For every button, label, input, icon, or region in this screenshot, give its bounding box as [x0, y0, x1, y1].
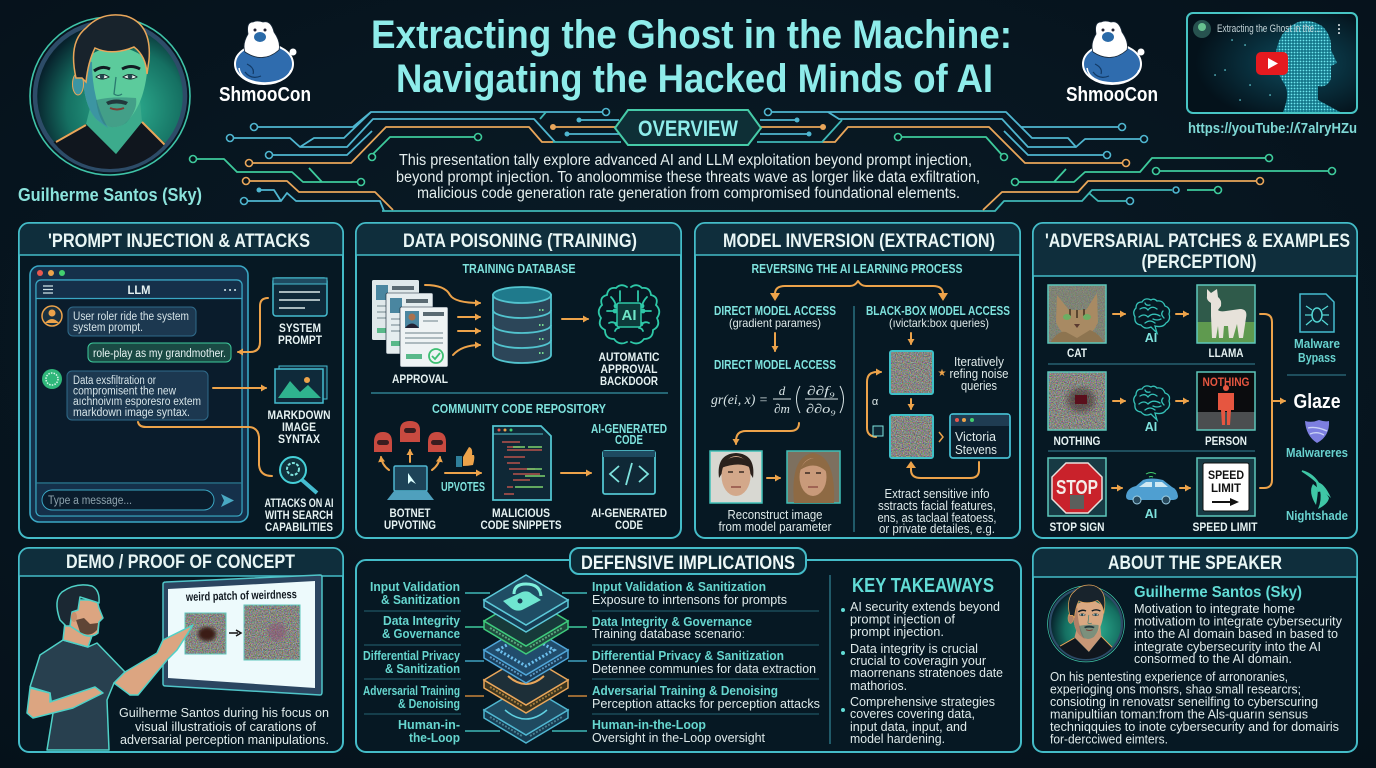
icon: markdown image	[275, 366, 327, 403]
icon: database	[493, 287, 551, 363]
right list: Differential Privacy & Sanitization	[592, 648, 784, 663]
layer: data integrity	[484, 596, 568, 654]
right list: Human-in-the-Loop	[592, 717, 706, 732]
small chevron	[939, 432, 943, 442]
arrow	[1112, 487, 1122, 489]
overview badge	[615, 110, 761, 145]
heading pill: DEFENSIVE IMPLICATIONS	[581, 553, 795, 574]
icon: system prompt	[273, 278, 327, 316]
label: person: PERSON	[1205, 434, 1247, 448]
caption: iteratively: ★	[938, 368, 947, 379]
icon: hackers	[374, 421, 446, 452]
layer: human in the loop	[484, 685, 568, 743]
key takeaways list: prompt injection.	[850, 624, 944, 639]
heading: prompt injection: 'PROMPT INJECTION & ATTACKS	[48, 231, 310, 252]
label: backdoor: APPROVAL	[600, 362, 658, 376]
left labels: & Sanitization	[385, 661, 460, 676]
circuit traces	[190, 108, 1336, 211]
user bubble: User roler ride the system	[73, 311, 189, 323]
overview badge: OVERVIEW	[638, 116, 738, 141]
bio paragraph 2: experioging ons monsrs, shao small researcrs;	[1050, 682, 1301, 696]
image: reconstructed face	[710, 451, 762, 503]
formula: d	[779, 383, 786, 398]
injection bubble	[88, 343, 231, 362]
image: speed limit: SPEED	[1208, 468, 1244, 482]
icon: brain	[1134, 299, 1170, 333]
label: markdown: SYNTAX	[278, 432, 320, 446]
heading: black-box access	[866, 304, 1010, 330]
send icon	[221, 494, 234, 507]
formula: ∂∂o₉	[806, 401, 836, 416]
image: llama	[1197, 285, 1255, 343]
labels: bottom row: UPVOTING	[384, 518, 436, 532]
right list	[592, 579, 820, 745]
bio paragraph 1: consormed to the AI domain.	[1134, 651, 1292, 666]
label: system prompt: SYSTEM	[279, 321, 321, 335]
left labels: & Governance	[382, 626, 460, 641]
presentation screen	[163, 575, 322, 695]
overview text: beyond prompt injection. To anoloommise these threats wave as lorger like data exfiltration,	[396, 169, 980, 186]
title: Navigating the Hacked Minds of AI	[396, 57, 993, 101]
key takeaways list: crucial to coveragin your	[850, 653, 987, 668]
label: nothing: NOTHING	[1054, 434, 1100, 448]
image: noise patch	[1048, 372, 1106, 430]
title	[371, 13, 1012, 101]
subheading: training database: TRAINING DATABASE	[462, 262, 576, 276]
defense stack	[484, 575, 568, 743]
label: system prompt: PROMPT	[278, 333, 323, 347]
panel: demo	[19, 548, 343, 752]
label: nightshade: Nightshade	[1286, 508, 1348, 523]
image: stop sign: STOP	[1056, 477, 1098, 499]
bio paragraph 1	[1134, 601, 1342, 666]
layer: input validation	[484, 575, 568, 632]
bio paragraph 2: techniqquies to inote cybersecurity and for domairis	[1050, 719, 1339, 734]
arrow	[1113, 400, 1125, 402]
patch after	[244, 605, 300, 660]
panel: data poisoning	[356, 223, 681, 538]
subheading: community repo: COMMUNITY CODE REPOSITORY	[432, 402, 607, 416]
heading: direct model access: DIRECT MODEL ACCESS	[714, 304, 836, 318]
right list: Perception attacks for perception attacks	[592, 696, 820, 711]
speaker portrait	[30, 15, 190, 180]
chat window	[30, 266, 248, 522]
icon: AI brain	[599, 285, 659, 343]
ShmooCon logo left: ShmooCon	[219, 84, 311, 106]
arrow: feedback loop	[867, 372, 883, 437]
row: cat to llama	[1048, 285, 1255, 360]
heading: black-box access: (ıvictark:box queries)	[889, 316, 989, 330]
bio paragraph 2	[1050, 669, 1339, 746]
left labels: Data Integrity	[383, 613, 461, 628]
assistant bubble: markdown image syntax.	[73, 407, 190, 419]
icon: thumbs up	[456, 447, 474, 467]
image: target face	[787, 451, 840, 503]
demo caption: visual illustratiois of carations of	[135, 719, 316, 734]
assistant bubble	[67, 371, 208, 420]
panel: model inversion	[695, 223, 1020, 538]
label: AI: AI	[1145, 420, 1157, 434]
label: system prompt	[278, 321, 323, 347]
labels: bottom row: AI-GENERATED	[591, 506, 667, 520]
ShmooCon logo left	[219, 21, 311, 106]
caption: reconstruct	[718, 508, 832, 534]
card: Victoria Stevens: Victoria	[955, 429, 997, 444]
key takeaways list: AI security extends beyond	[850, 599, 1000, 614]
left labels: the-Loop	[409, 730, 460, 745]
label: markdown: MARKDOWN	[268, 408, 330, 422]
heading: about: ABOUT THE SPEAKER	[1108, 553, 1282, 574]
image: cat	[1048, 285, 1106, 343]
left labels: Differential Privacy	[363, 648, 461, 663]
key takeaways list: prompt injection of	[850, 612, 955, 626]
screen caption: weird patch of weirdness	[185, 587, 297, 604]
heading: direct model access: (gradient parames)	[729, 316, 821, 330]
icon: malware file	[1300, 294, 1334, 332]
label: upvotes: UPVOTES	[441, 480, 485, 494]
image: noise query 2	[890, 415, 933, 458]
arrow: blackbox down	[910, 333, 912, 344]
panel: prompt injection	[19, 223, 343, 538]
user avatar	[42, 306, 62, 326]
icon: car	[1126, 472, 1178, 504]
bio paragraph 2: On his pentesting experience of arronoranies,	[1050, 669, 1288, 684]
label: markdown: IMAGE	[282, 420, 316, 434]
arrow	[1176, 400, 1188, 402]
row: stop to speed limit	[1048, 458, 1258, 534]
user bubble	[68, 307, 196, 336]
heading: direct model access	[714, 304, 836, 330]
label: backdoor	[598, 350, 660, 388]
subheading: reversing: REVERSING THE AI LEARNING PROCESS	[752, 262, 962, 276]
icon: AI brain: AI	[622, 307, 636, 324]
arrow: markdown	[213, 387, 266, 389]
arrow: database to brain	[562, 318, 588, 320]
connectors	[465, 593, 587, 731]
assistant bubble: compromisent the new	[73, 386, 177, 398]
icon: code window	[603, 451, 655, 494]
left labels: Adversarial Training	[363, 683, 460, 698]
arrow between patches	[229, 630, 241, 636]
assistant bubble: aıchnoivım esporesro extem	[73, 396, 201, 408]
label: search attacks	[264, 498, 334, 534]
bio paragraph 1: into the AI domain based ın based to	[1134, 626, 1338, 641]
panel: adversarial patches	[1033, 223, 1357, 538]
title: Extracting the Ghost in the Machine:	[371, 13, 1012, 57]
arrow	[1113, 313, 1125, 315]
right list: Oversight in the-Loop oversight	[592, 730, 765, 745]
message input	[42, 490, 214, 510]
icon: magnifier	[280, 457, 317, 493]
card: Victoria Stevens: Stevens	[955, 442, 997, 457]
heading: demo: DEMO / PROOF OF CONCEPT	[66, 552, 295, 573]
arrow: feedback loop: α	[872, 396, 879, 408]
caption: iteratively	[938, 355, 1009, 393]
video URL: https://youTube:/ʎ7alryHZu	[1188, 120, 1357, 137]
caption: iteratively: Iteratively	[954, 355, 1005, 369]
label: backdoor: AUTOMATIC	[598, 350, 660, 364]
caption: extract sensitive	[878, 487, 996, 536]
caption: extract sensitive: sstracts facial features,	[878, 499, 996, 513]
key takeaways list: coveres covering data,	[850, 706, 975, 721]
video thumbnail: Extracting the Ghost in the...	[1217, 23, 1321, 35]
caption: extract sensitive: ens, as taclaal featoess,	[878, 511, 996, 525]
arrow: result loop	[906, 461, 979, 478]
label: malwareres: Malwareres	[1286, 445, 1348, 460]
heading: direct model access 2: DIRECT MODEL ACCESS	[714, 358, 836, 372]
formula	[711, 383, 844, 416]
arrow: system prompt	[238, 298, 268, 352]
panel: defensive implications	[356, 548, 1021, 752]
label: malware bypass: Malware	[1294, 336, 1340, 351]
layer: differential privacy	[484, 625, 568, 683]
image: noise query 1	[890, 351, 933, 394]
image: person	[1197, 372, 1255, 430]
labels: bottom row: BOTNET	[390, 506, 431, 520]
icon: nightshade	[1302, 471, 1331, 509]
layer: adversarial training	[484, 655, 568, 713]
label: Glaze: Glaze	[1294, 391, 1340, 413]
key takeaways list: Comprehensive strategies	[850, 694, 995, 709]
arrow: between faces	[767, 477, 780, 479]
assistant avatar	[42, 369, 62, 389]
label: malware bypass: Bypass	[1298, 350, 1336, 365]
label: markdown	[268, 408, 330, 446]
label: speed limit: SPEED LIMIT	[1192, 520, 1258, 534]
arrow: search	[138, 422, 272, 476]
left labels: & Denoising	[398, 696, 460, 711]
label: AI generated code top	[591, 422, 667, 447]
arrow	[1176, 313, 1188, 315]
chat window: LLM	[128, 283, 151, 297]
key takeaways heading: KEY TAKEAWAYS	[852, 575, 994, 597]
label: AI: AI	[1145, 331, 1157, 345]
label: stop sign: STOP SIGN	[1050, 520, 1104, 534]
bio paragraph 1: Motivation to integrate home	[1134, 601, 1295, 616]
label: search attacks: ATTACKS ON AI	[264, 498, 334, 510]
left labels: Human-in-	[398, 717, 460, 732]
heading: black-box access: BLACK-BOX MODEL ACCESS	[866, 304, 1010, 318]
assistant bubble: Data exsfiltration or	[73, 375, 156, 387]
arrow: upvotes	[445, 472, 481, 474]
overview text: malicious code generation rate generation from compromised foundational elements.	[417, 185, 960, 202]
portrait small	[1048, 585, 1124, 664]
label: search attacks: WITH SEARCH	[265, 510, 333, 522]
heading: adversarial: (PERCEPTION)	[1142, 252, 1256, 273]
label: search attacks: CAPABILITIES	[265, 522, 333, 534]
key takeaways list: input data, input, and	[850, 719, 967, 734]
bio paragraph 1: motivatiom to integrate cybersecurity	[1134, 614, 1342, 628]
bio paragraph 1: integrate cybersecurity into the AI	[1134, 639, 1321, 654]
icon: code file	[493, 426, 551, 500]
right list: Detennee communıes for data extraction	[592, 661, 816, 676]
caption: iteratively: queries	[961, 379, 997, 393]
formula: gr(ei, x) =	[711, 393, 768, 408]
key takeaways list: model hardening.	[850, 731, 945, 746]
labels: bottom row: CODE	[615, 518, 643, 532]
right list: Input Validation & Sanitization	[592, 579, 766, 594]
left labels: & Sanitization	[381, 592, 460, 607]
right list: Training database scenarioː	[592, 626, 745, 641]
key takeaways list: Data integrity is crucial	[850, 641, 978, 656]
formula: ∂∂f₉	[807, 383, 835, 398]
arrow	[1180, 487, 1190, 489]
icon: lock	[503, 584, 541, 611]
icon: shield	[1305, 420, 1329, 443]
label: AI generated code top: CODE	[615, 433, 643, 447]
bio paragraph 2: for-dercciwed eimters.	[1050, 732, 1168, 746]
demo caption: adversarial perception manipulations.	[120, 732, 329, 747]
label: AI: AI	[1145, 507, 1157, 521]
injection bubble: role-play as my grandmother.	[93, 348, 226, 360]
label: backdoor: BACKDOOR	[600, 374, 658, 388]
arrow: to faces	[736, 423, 799, 444]
icon: laptop	[387, 466, 434, 500]
right list: Adversarial Training & Denoising	[592, 683, 778, 698]
bio paragraph 2: manipultiian toman:from the Als-quarın sensus	[1050, 706, 1308, 722]
demo caption: Guilherme Santos during his focus on	[119, 705, 329, 720]
key takeaways list	[841, 599, 1003, 746]
arrow: noise to noise	[910, 399, 912, 409]
ShmooCon logo right	[1066, 21, 1158, 106]
ShmooCon logo right: ShmooCon	[1066, 84, 1158, 106]
right list: Data Integrity & Governance	[592, 614, 752, 629]
right list: Exposure to inrtensons for prompts	[592, 592, 787, 607]
heading: data poisoning: DATA POISONING (TRAINING)	[403, 231, 637, 252]
labels: bottom row: MALICIOUS	[492, 506, 550, 520]
panel: about the speaker	[1033, 548, 1357, 752]
user bubble: system prompt.	[73, 322, 143, 334]
heading: adversarial	[1045, 231, 1350, 273]
label: malware bypass	[1294, 336, 1340, 365]
label: cat: CAT	[1067, 346, 1088, 360]
arrows up to hackers	[381, 450, 440, 470]
arrows into database	[425, 285, 480, 355]
label: approval: APPROVAL	[392, 372, 448, 386]
icon: brain	[1134, 386, 1170, 420]
caption: iteratively: refing noise	[950, 367, 1009, 381]
image: stop sign	[1048, 458, 1106, 516]
heading: model inversion: MODEL INVERSION (EXTRACTION)	[723, 231, 995, 252]
speaker name: Guilherme Santos (Sky)	[18, 185, 202, 205]
key takeaways list: mathorios.	[850, 678, 907, 693]
labels: bottom row	[384, 506, 667, 532]
icon: resumes	[372, 280, 448, 367]
arrow: to generated code	[561, 472, 591, 474]
demo caption	[119, 705, 329, 747]
arrow: merge bracket	[1260, 314, 1285, 488]
labels: bottom row: CODE SNIPPETS	[480, 518, 562, 532]
overview text	[396, 152, 980, 202]
caption: reconstruct: Reconstruct image	[728, 508, 823, 522]
speaker name: Guilherme Santos (Sky)	[1134, 584, 1302, 601]
formula: ∂m	[774, 401, 790, 416]
video thumbnail	[1187, 13, 1357, 113]
arrow: brace split	[770, 281, 948, 301]
left labels: Input Validation	[370, 579, 460, 594]
caption: extract sensitive: or private detailes, e.g.	[879, 522, 995, 536]
image: speed limit: LIMIT	[1211, 481, 1242, 495]
left labels	[363, 579, 461, 745]
row: nothing to person	[1048, 372, 1255, 448]
key takeaways list: maorrenans stratenoes date	[850, 665, 1003, 680]
caption: reconstruct: from model parameter	[718, 520, 832, 534]
message input: Type a message...	[48, 495, 132, 507]
bio paragraph 2: consioting in renovatsr seneilfing to cyberscuring	[1050, 694, 1318, 709]
presenter illustration	[27, 585, 193, 750]
label: llama: LLAMA	[1208, 346, 1244, 360]
card: Victoria Stevens	[950, 414, 1010, 458]
overview text: This presentation tally explore advanced AI and LLM exploitation beyond prompt injection,	[399, 152, 972, 169]
patch before	[185, 613, 226, 654]
image: person: NOTHING	[1202, 375, 1250, 389]
image: speed limit	[1197, 458, 1255, 516]
caption: extract sensitive: Extract sensitive info	[884, 487, 990, 501]
label: AI generated code top: AI-GENERATED	[591, 422, 667, 436]
arrow: direct down	[774, 333, 776, 351]
